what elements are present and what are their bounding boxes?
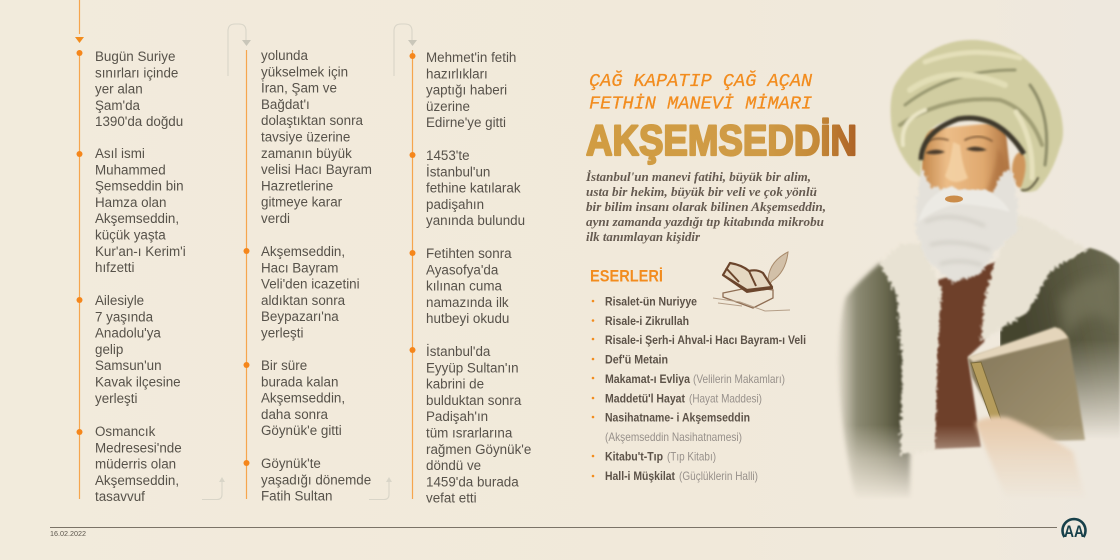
portrait [838,40,1120,500]
entry: Ayasofya: hutbeyi okudu [426,311,509,326]
logo: AA: AA [1064,522,1084,541]
work 9 [605,469,758,483]
heading: subtitle [589,70,813,114]
entry: Ayasofya: Fetihten sonra [426,246,512,261]
entry: name: Akşemseddin, [95,211,179,226]
entry: Edirne: yaptığı haberi [426,83,507,98]
entry: Fatih: Fatih Sultan [261,489,332,504]
date: 16.02.2022 [50,529,86,538]
entry: Ayasofya: Ayasofya'da [426,262,499,277]
work 1: Risalet-ün Nuriyye [605,294,697,308]
work 5 [605,372,785,386]
work 5: (Velilerin Makamları) [693,372,785,386]
entry: birth: yer alan [95,82,143,97]
entry: Samsun: Anadolu'ya [95,326,161,341]
entry: death: tüm ısrarlarına [426,426,513,440]
entry: travels: dolaştıktan sonra [261,113,364,128]
entry: Edirne: hazırlıkları [426,66,488,81]
entry: name: hıfzetti [95,260,134,275]
column 1 text [95,49,186,504]
book cover [968,328,1085,442]
connector arrows [202,24,417,500]
entry: travels: yolunda [261,48,308,63]
timeline dots [76,50,416,466]
ground strokes [713,298,790,311]
cheek shadow [986,152,1004,192]
entry: Edirne: Mehmet'in fetih [426,50,516,65]
entry: name: Muhammed [95,162,166,177]
heading: subtitle: FETHİN MANEVİ MİMARI [589,94,812,114]
entry: Edirne: Edirne'ye gitti [426,115,506,130]
column 2 text [261,48,372,504]
book pages [968,327,1068,362]
turban [891,40,1063,192]
intro paragraph: bir bilim insanı olarak bilinen Akşemseddin, [586,200,826,214]
timeline rails [75,0,412,499]
intro paragraph: ilk tanımlayan kişidir [586,230,700,244]
ear [1012,152,1030,188]
entry: name: küçük yaşta [95,228,166,242]
turban folds [900,52,1047,190]
entry: Osmancık: Osmancık [95,424,156,439]
entry: name: Şemseddin bin [95,179,184,194]
work 7 [605,410,750,444]
entry: Osmancık: tasavvuf [95,489,145,504]
entry: Samsun: Ailesiyle [95,293,144,308]
entry: Samsun: 7 yaşında [95,309,154,324]
eyes [925,147,987,154]
nose [945,142,968,182]
work 6 [605,392,762,406]
entry: Samsun: Kavak ilçesine [95,374,181,390]
work 3: Risale-i Şerh-i Ahval-i Hacı Bayram-ı Veli [605,333,806,347]
entry: conquest: yanında bulundu [426,213,525,228]
intro paragraph: İstanbul'un manevi fatihi, büyük bir alim, [585,170,811,184]
entry: conquest: fethine katılarak [426,181,521,196]
quill [767,252,788,288]
entry: death: rağmen Göynük'e [426,442,531,457]
entry: death: bulduktan sonra [426,393,522,408]
open book [723,263,772,290]
entry: death: İstanbul'da [426,344,491,359]
brows [925,137,992,143]
heading: works: ESERLERİ [590,266,663,286]
beard shade [925,217,990,265]
lips [945,196,963,202]
entry: name: Asıl ismi [95,146,145,161]
entry: Ayasofya: namazında ilk [426,295,509,310]
entry: birth: Şam'da [95,98,141,113]
entry: Ayasofya: kılınan cuma [426,279,502,294]
entry: Osmancık: Akşemseddin, [95,473,179,488]
entry: travels: velisi Hacı Bayram [261,162,372,177]
entry: Beypazarı: Veli'den icazetini [261,277,360,292]
fur collar right [980,215,1087,342]
entry: travels: Bağdat'ı [261,97,310,112]
entry: death: kabrini de [426,377,484,392]
intro paragraph: usta bir hekim, büyük bir veli ve çok yönlü [586,185,817,199]
entry: conquest: İstanbul'un [426,164,490,179]
entry: Fatih: Göynük'te [261,456,321,471]
work 9: Hall-i Müşkilat [605,469,675,483]
entry: Fatih: yaşadığı dönemde [261,472,371,487]
entry: death: Padişah'ın [426,409,488,424]
entry: Samsun: Samsun'un [95,358,162,373]
entry: birth: 1390'da doğdu [95,114,183,129]
entry: Beypazarı: Akşemseddin, [261,244,345,259]
column 3 text [426,50,531,506]
intro paragraph [585,170,826,244]
book spine [970,362,1001,420]
work 8: Kitabu't-Tıp [605,450,663,464]
entry: death: vefat etti [426,491,477,506]
entry: travels: İran, Şam ve [261,81,337,96]
entry: Beypazarı: Hacı Bayram [261,260,338,275]
entry: travels: zamanın büyük [261,146,352,161]
footer rule [50,526,1057,528]
entry: name: Hamza olan [95,195,166,210]
entry: travels: gitmeye karar [261,195,343,210]
work 7: Nasihatname- i Akşemseddin [605,410,750,424]
entry: name: Kur'an-ı Kerim'i [95,244,186,259]
entry: birth: sınırları içinde [95,65,178,80]
entry: Göynük: Akşemseddin, [261,391,345,406]
entry: travels: tavsiye üzerine [261,130,350,144]
entry: death: döndü ve [426,458,481,473]
entry: death: 1459'da burada [426,474,519,489]
book thickness [723,268,773,292]
entry: Göynük: daha sonra [261,407,329,422]
entry: conquest: padişahın [426,197,484,212]
entry: Edirne: üzerine [426,99,470,114]
hair band [921,118,1024,160]
book [968,327,1085,442]
work 2: Risale-i Zikrullah [605,314,689,328]
entry: conquest: 1453'te [426,148,470,163]
lower book [723,287,773,308]
work 4: Def'ü Metain [605,352,668,366]
face [920,123,1012,194]
inner robe [934,262,996,449]
entry: travels: yükselmek için [261,64,348,79]
entry: Samsun: yerleşti [95,391,137,406]
entry: Beypazarı: Beypazarı'na [261,309,339,324]
list bullets [592,300,594,477]
work 5: Makamat-ı Evliya [605,372,690,386]
heading: subtitle: ÇAĞ KAPATIP ÇAĞ AÇAN [589,70,813,92]
work 6: (Hayat Maddesi) [689,392,762,406]
intro paragraph: aynı zamanda yazdığı tıp kitabında mikrobu [586,215,824,229]
works list [592,294,806,483]
heading: name: AKŞEMSEDDİN [586,117,857,165]
entry: Osmancık: müderris olan [95,457,176,472]
coat right [1000,246,1120,434]
entry: Göynük: burada kalan [261,374,338,389]
entry: Samsun: gelip [95,342,123,357]
entry: Göynük: Göynük'e gitti [261,423,342,438]
work 6: Maddetü'l Hayat [605,392,685,406]
beard [916,168,1018,283]
entry: death: Eyyüp Sultan'ın [426,360,519,375]
entry: Göynük: Bir süre [261,358,307,373]
coat left [838,263,910,500]
fur collar left [880,243,941,455]
work 7: (Akşemseddin Nasihatnamesi) [605,430,742,444]
hand [972,414,1078,486]
entry: Beypazarı: yerleşti [261,326,303,340]
work 8 [605,450,716,464]
work 8: (Tıp Kitabı) [667,450,716,464]
entry: birth: Bugün Suriye [95,49,175,64]
moustache [920,185,1007,218]
entry: travels: verdi [261,211,290,226]
icon: book and quill [713,252,790,311]
entry: Beypazarı: aldıktan sonra [261,293,346,308]
work 9: (Güçlüklerin Halli) [679,469,758,483]
entry: travels: Hazretlerine [261,178,333,193]
entry: Osmancık: Medresesi'nde [95,440,182,455]
